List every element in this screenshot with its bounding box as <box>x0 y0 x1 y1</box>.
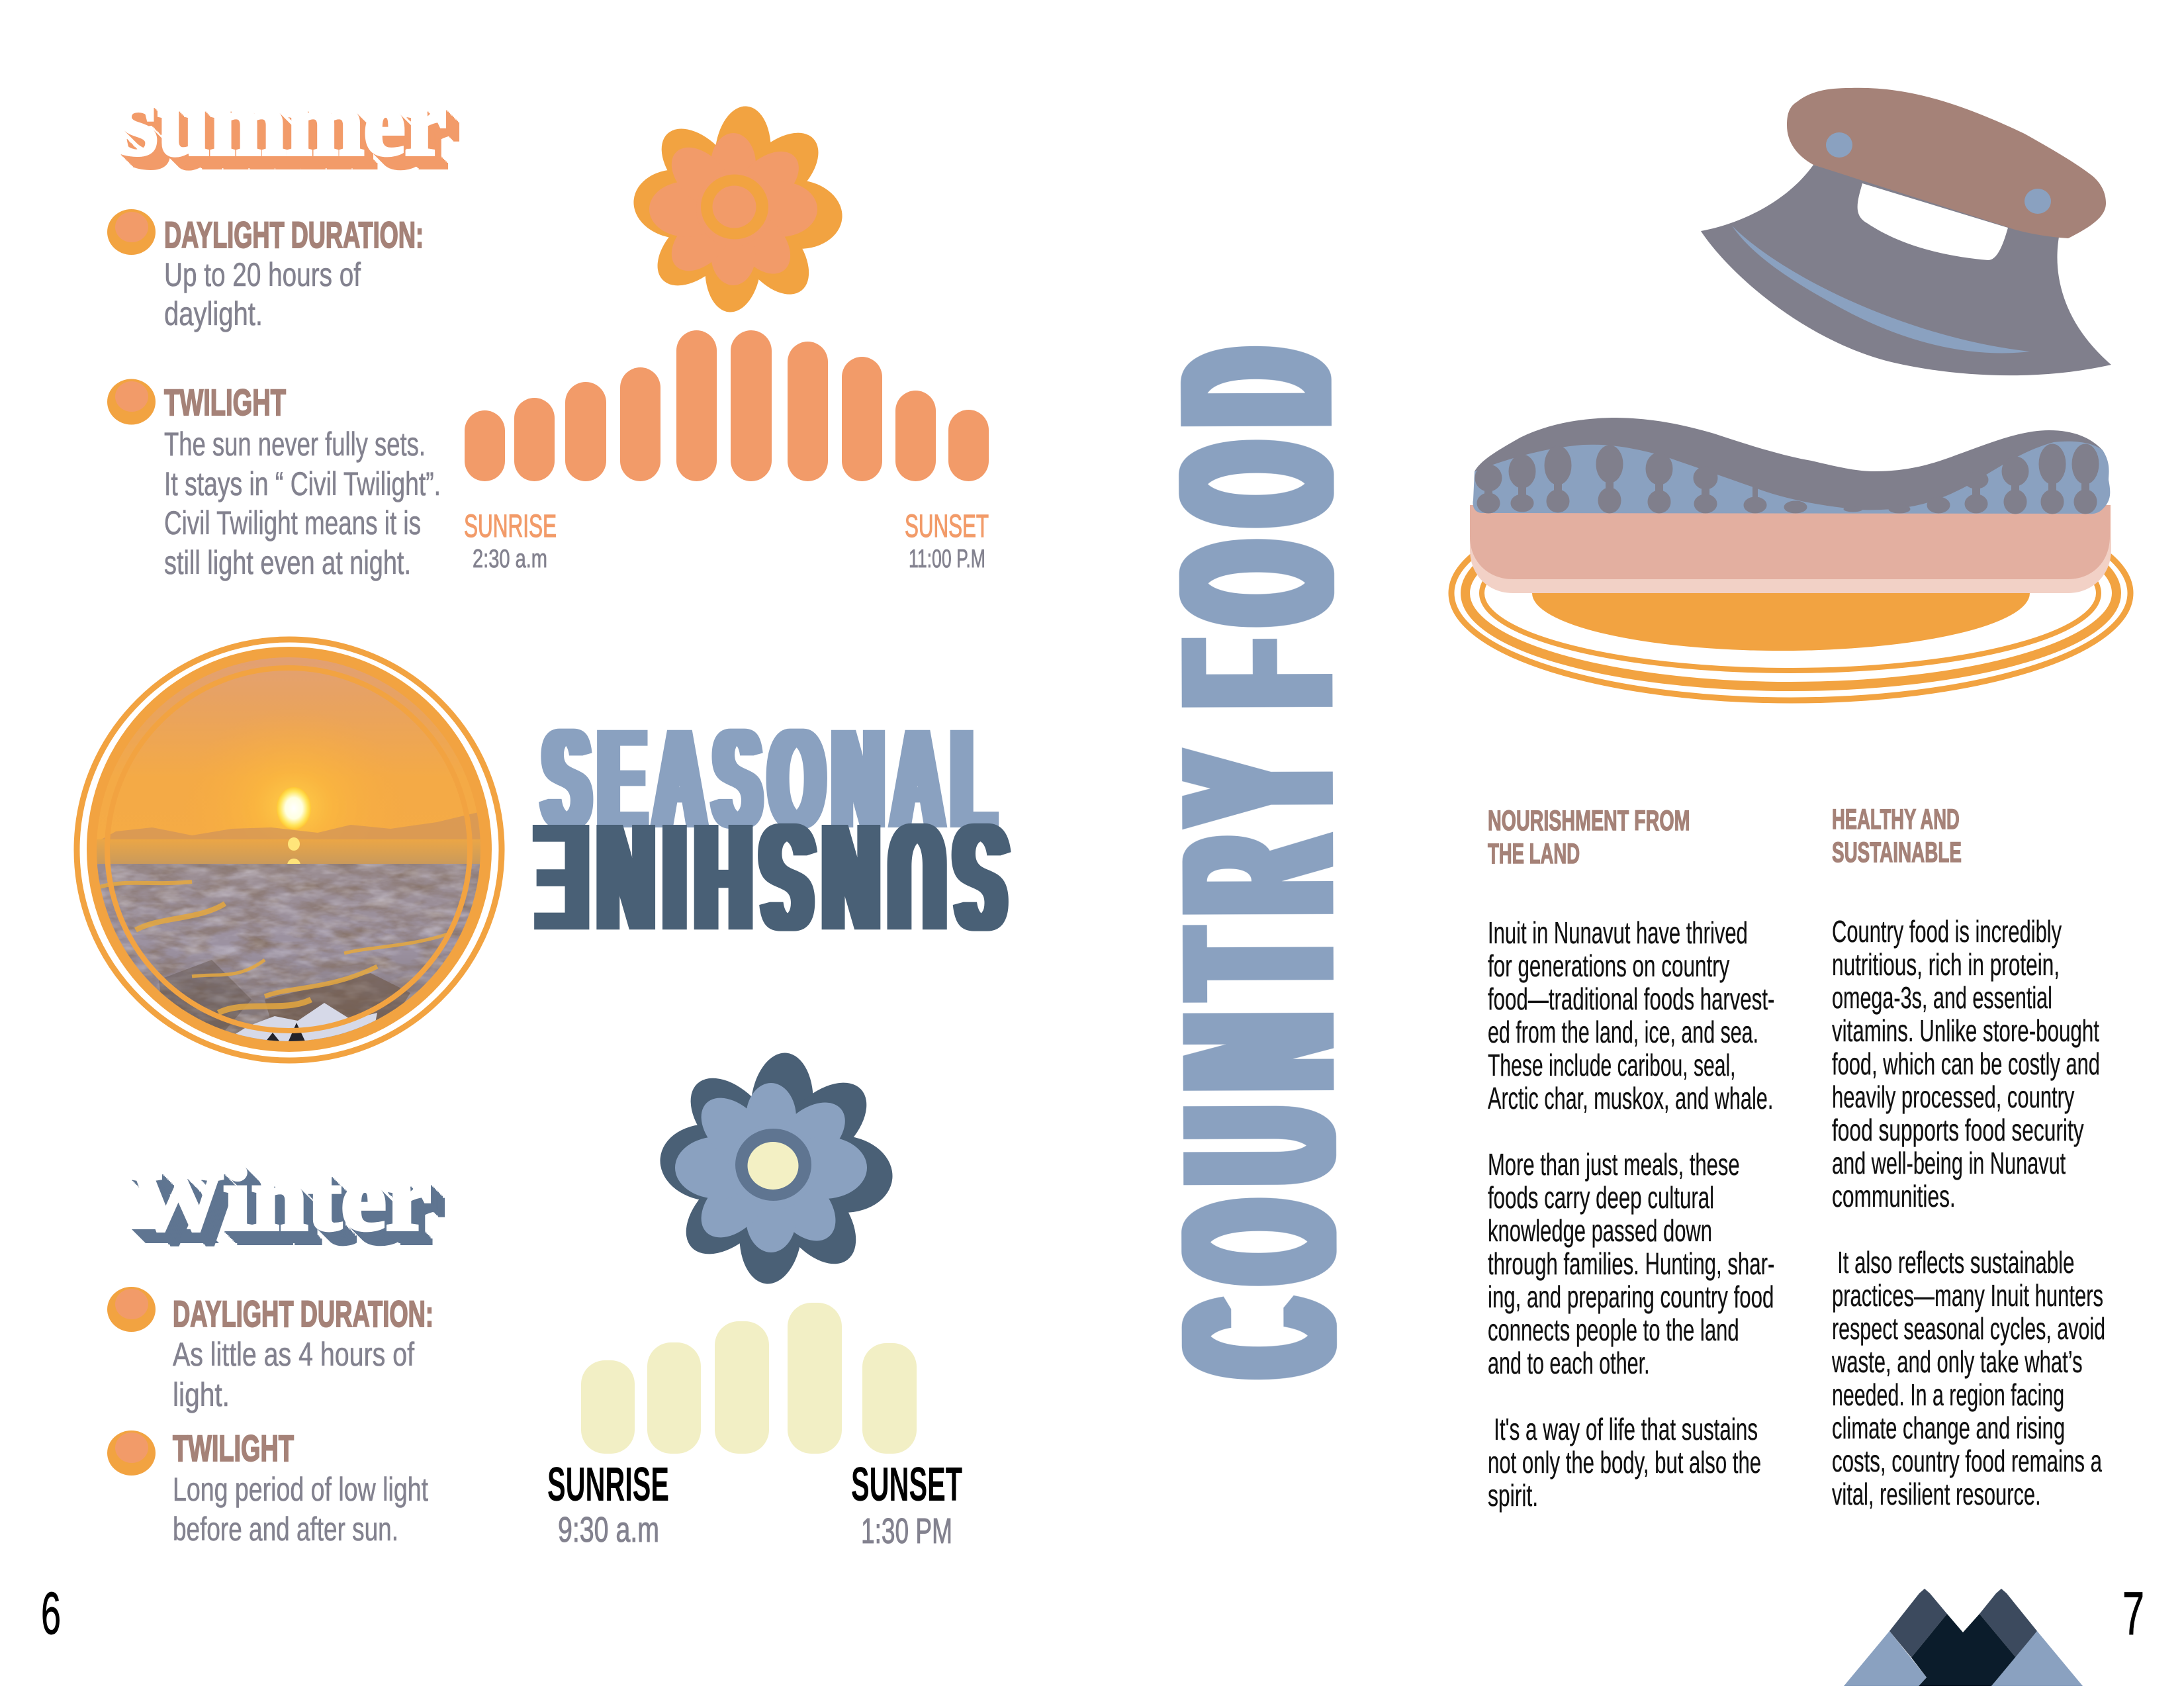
body text: knowledge passed down <box>1488 1213 1712 1248</box>
body text: communities. <box>1832 1179 1956 1213</box>
text: daylight detail: daylight. <box>164 295 263 332</box>
body text: through families. Hunting, shar- <box>1488 1246 1774 1281</box>
label: winter sunrise <box>547 1458 669 1550</box>
heading: HEALTHY AND <box>1832 804 1960 835</box>
icon: bullet twilight <box>107 379 156 425</box>
column: healthy and sustainable <box>1831 804 2105 1511</box>
body text: not only the body, but also the <box>1488 1445 1761 1479</box>
label: summer sunrise: 2:30 a.m <box>473 545 547 573</box>
title: SUNSHINE upside down: SUNSHINE <box>526 792 1007 962</box>
label: twilight: TWILIGHT <box>173 1427 294 1469</box>
body text: More than just meals, these <box>1488 1147 1740 1182</box>
text: twilight detail: Long period of low light <box>173 1471 428 1508</box>
icon: mountain logo <box>1844 1589 2083 1686</box>
fish skin grey <box>1475 418 2103 510</box>
body text: nutritious, rich in protein, <box>1832 947 2060 982</box>
icon: ulu knife <box>1701 88 2111 375</box>
rivets <box>1826 132 2051 214</box>
handle opening <box>1858 183 2008 260</box>
body text: It also reflects sustainable <box>1837 1245 2074 1280</box>
body text: Country food is incredibly <box>1832 914 2062 949</box>
label: winter sunrise: 9:30 a.m <box>558 1510 659 1550</box>
fish spots <box>1475 444 2099 514</box>
text: daylight detail <box>173 1336 414 1413</box>
heading: THE LAND <box>1488 838 1580 870</box>
body text: food—traditional foods harvest- <box>1488 982 1774 1016</box>
text: twilight detail: It stays in “ Civil Twilight”. <box>164 465 441 502</box>
body text <box>1488 915 1774 1513</box>
label: summer sunrise <box>464 509 557 573</box>
body text: vital, resilient resource. <box>1832 1477 2041 1511</box>
heading: Winter: Winter <box>132 1148 431 1249</box>
text: daylight detail: Up to 20 hours of <box>164 256 361 293</box>
fish flesh <box>1470 505 2111 593</box>
body text: ing, and preparing country food <box>1488 1280 1774 1314</box>
body text: foods carry deep cultural <box>1488 1180 1714 1215</box>
icon: bullet daylight <box>107 209 156 255</box>
body text: needed. In a region facing <box>1832 1378 2064 1412</box>
plate centre <box>1532 593 2030 651</box>
text: daylight detail: As little as 4 hours of <box>173 1336 414 1373</box>
heading <box>1832 804 1962 868</box>
heading: SUSTAINABLE <box>1832 837 1962 868</box>
chart: summer daylight bars <box>465 330 989 481</box>
page number 6: 6 <box>41 1581 61 1647</box>
panel: winter <box>107 1051 962 1551</box>
label: summer sunset: 11:00 P.M <box>909 545 985 573</box>
text: daylight detail: light. <box>173 1376 230 1413</box>
column: nourishment from the land <box>1488 805 1774 1513</box>
plate <box>1451 486 2130 700</box>
body text: and well-being in Nunavut <box>1832 1146 2066 1180</box>
body text: and to each other. <box>1488 1346 1650 1380</box>
body text: Inuit in Nunavut have thrived <box>1488 915 1748 950</box>
label: twilight: TWILIGHT <box>164 381 286 423</box>
icon: winter flower <box>657 1051 895 1286</box>
icon: summer flower <box>631 104 845 314</box>
heading: Summer: Summer <box>118 73 446 174</box>
text: SEASONAL <box>543 700 1004 858</box>
body text: ed from the land, ice, and sea. <box>1488 1015 1758 1049</box>
label: summer sunrise: SUNRISE <box>464 509 557 544</box>
text: twilight detail: The sun never fully sets. <box>164 426 426 463</box>
body text <box>1831 914 2105 1511</box>
body text: These include caribou, seal, <box>1488 1048 1736 1082</box>
label: daylight duration: DAYLIGHT DURATION: <box>164 214 424 256</box>
text: daylight detail <box>164 256 361 332</box>
body text: climate change and rising <box>1832 1411 2065 1445</box>
icon: fish on plate <box>1451 418 2130 700</box>
label: winter sunset: SUNSET <box>851 1458 962 1511</box>
photo: arctic sunset in rings <box>77 639 502 1060</box>
handle <box>1787 88 2106 238</box>
chart: winter daylight bars <box>581 1303 917 1454</box>
text: twilight detail: still light even at night. <box>164 544 411 581</box>
label: winter sunset: 1:30 PM <box>861 1511 952 1551</box>
page number 7: 7 <box>2122 1580 2144 1648</box>
icon: bullet twilight <box>107 1430 156 1476</box>
heading <box>1488 805 1690 870</box>
text: twilight detail <box>173 1471 428 1548</box>
body text: It's a way of life that sustains <box>1494 1412 1758 1446</box>
label: summer sunset <box>905 509 989 573</box>
text: twilight detail: Civil Twilight means it is <box>164 504 421 541</box>
body text: for generations on country <box>1488 949 1730 983</box>
body text: Arctic char, muskox, and whale. <box>1488 1081 1773 1115</box>
blade highlight <box>1732 226 2030 353</box>
label: winter sunset <box>851 1458 962 1551</box>
label: winter sunrise: SUNRISE <box>547 1458 669 1511</box>
body text: omega-3s, and essential <box>1832 980 2052 1015</box>
label: daylight duration: DAYLIGHT DURATION: <box>173 1293 433 1335</box>
body text: connects people to the land <box>1488 1313 1739 1347</box>
heading: NOURISHMENT FROM <box>1488 805 1690 837</box>
text: twilight detail: before and after sun. <box>173 1511 398 1548</box>
fish skin blue <box>1473 434 2110 514</box>
body text: spirit. <box>1488 1478 1538 1513</box>
icon: bullet daylight <box>107 1287 156 1332</box>
blade <box>1701 165 2111 375</box>
panel: summer <box>107 73 989 581</box>
text: twilight detail <box>164 426 441 581</box>
label: summer sunset: SUNSET <box>905 509 989 544</box>
